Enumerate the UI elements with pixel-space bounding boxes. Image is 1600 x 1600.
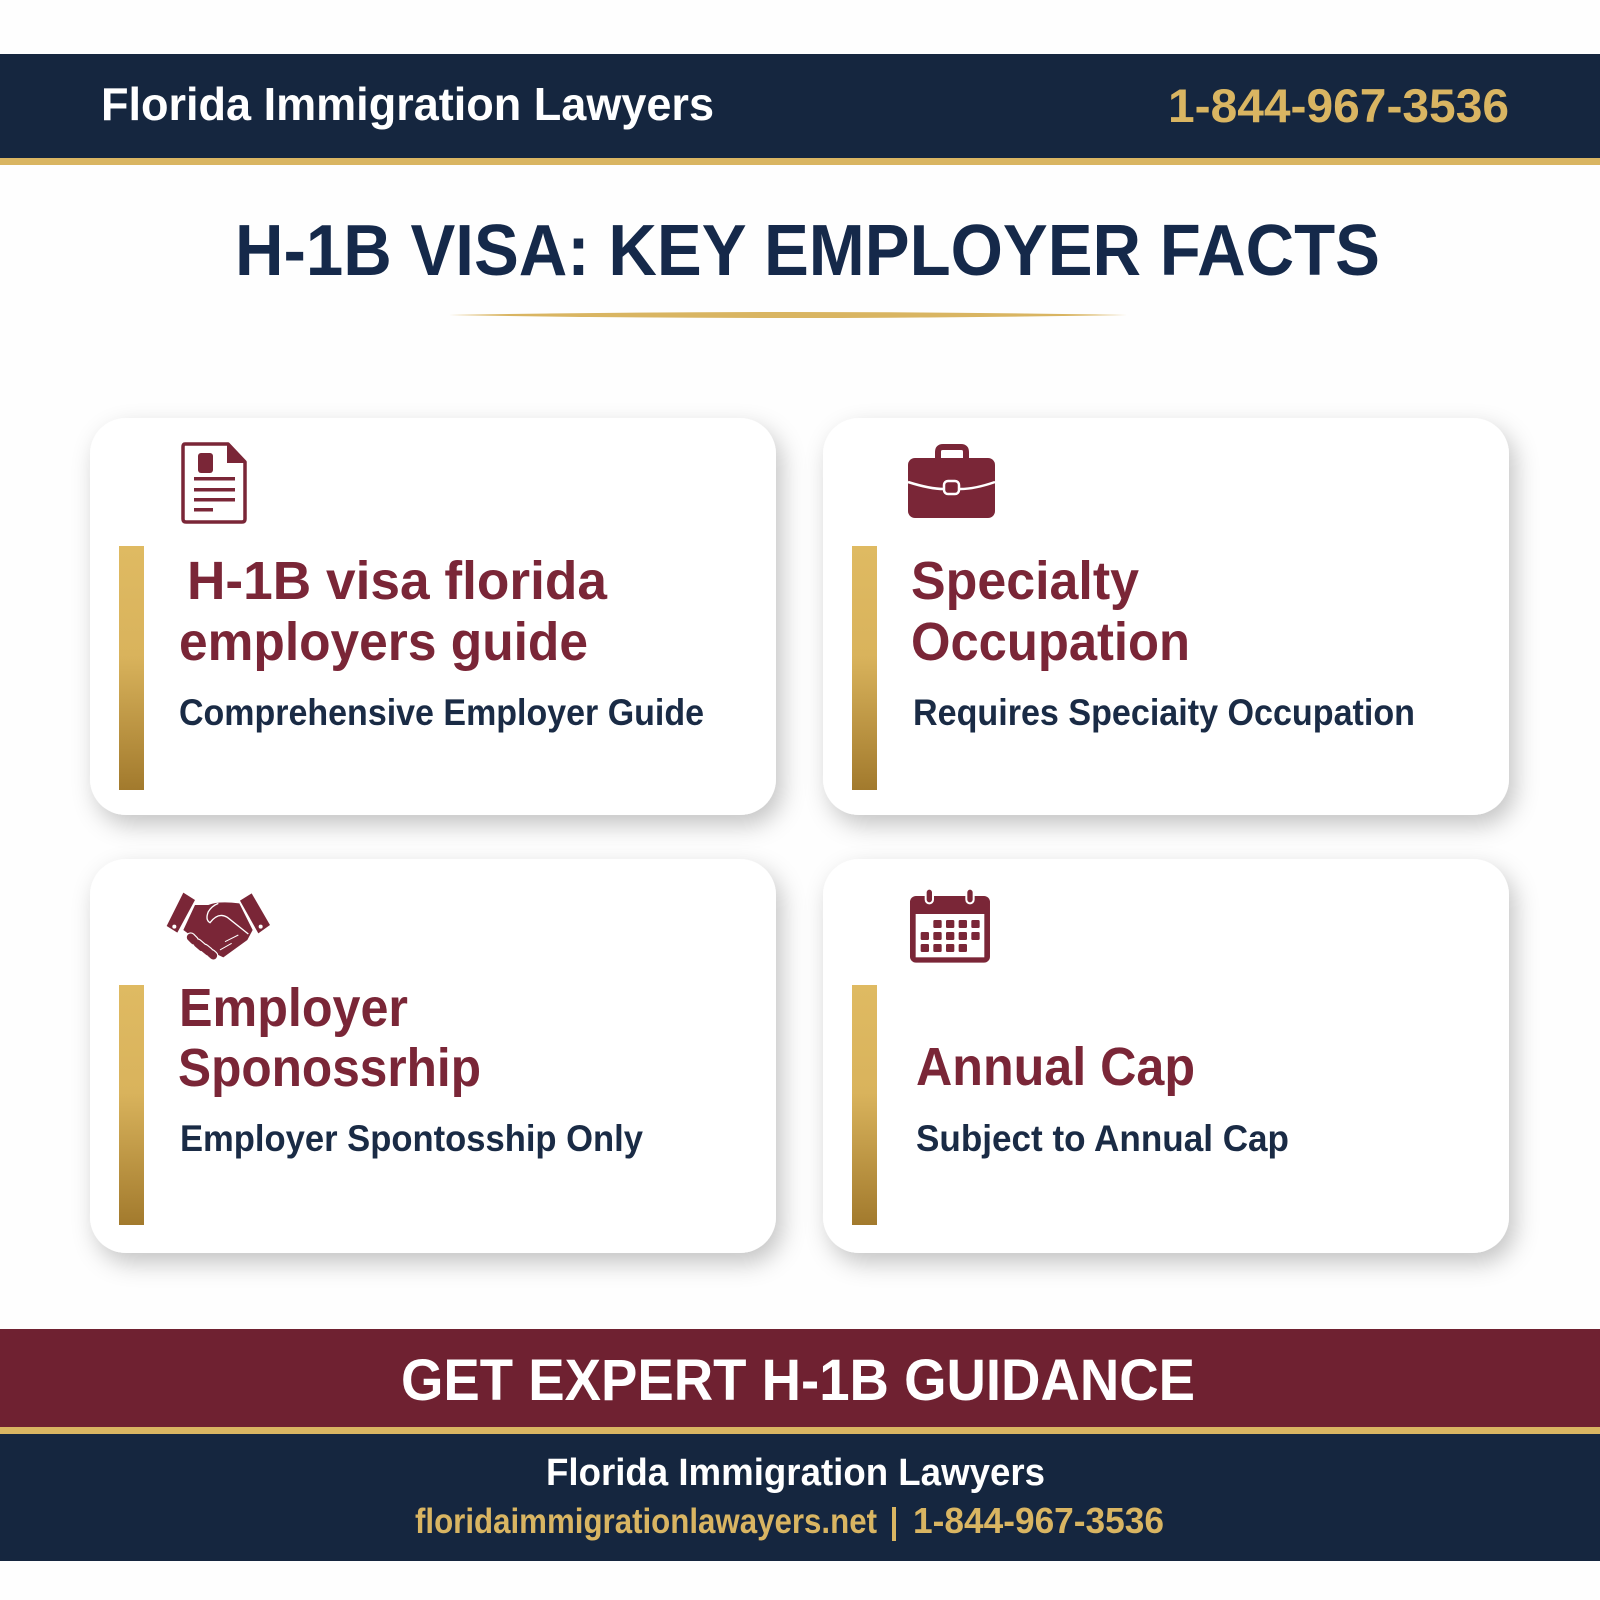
card description: Employer Spontosship Only bbox=[180, 1118, 643, 1159]
card heading: Specialty bbox=[911, 551, 1139, 611]
panel: Specialty Occupation bbox=[823, 418, 1509, 815]
icon: document bbox=[183, 444, 245, 522]
card heading: H-1B visa florida bbox=[187, 551, 608, 611]
header phone number: 1-844-967-3536 bbox=[1168, 79, 1509, 132]
header firm name: Florida Immigration Lawyers bbox=[101, 78, 714, 130]
card heading: Annual Cap bbox=[916, 1037, 1195, 1097]
panel: Annual Cap bbox=[823, 859, 1509, 1253]
footer firm name: Florida Immigration Lawyers bbox=[546, 1452, 1045, 1494]
card description: Subject to Annual Cap bbox=[916, 1118, 1289, 1159]
card heading: Sponossrhip bbox=[178, 1038, 481, 1098]
card heading: Occupation bbox=[911, 612, 1190, 672]
title underline bbox=[449, 312, 1127, 318]
call to action band bbox=[0, 1329, 1600, 1434]
footer phone number: 1-844-967-3536 bbox=[913, 1500, 1164, 1541]
card heading bbox=[179, 551, 608, 672]
card heading bbox=[178, 978, 481, 1098]
card description: Comprehensive Employer Guide bbox=[179, 692, 704, 733]
header band bbox=[0, 54, 1600, 165]
panel: H-1B visa florida employers guide bbox=[90, 418, 776, 815]
icon: handshake bbox=[167, 893, 270, 957]
gold bar 3 bbox=[119, 985, 144, 1225]
icon: calendar bbox=[910, 889, 990, 963]
gold bar 1 bbox=[119, 546, 144, 790]
card heading: employers guide bbox=[179, 612, 588, 672]
card description: Requires Speciaity Occupation bbox=[913, 692, 1415, 733]
icon: briefcase bbox=[908, 447, 995, 518]
card heading: Employer bbox=[179, 978, 408, 1038]
gold bar 2 bbox=[852, 546, 877, 790]
footer separator bbox=[892, 1507, 896, 1541]
card heading bbox=[911, 551, 1190, 672]
gold bar 4 bbox=[852, 985, 877, 1225]
footer website: floridaimmigrationlawayers.net bbox=[415, 1502, 877, 1541]
call to action text: GET EXPERT H-1B GUIDANCE bbox=[401, 1348, 1195, 1413]
main title: H-1B VISA: KEY EMPLOYER FACTS bbox=[235, 211, 1380, 291]
footer band bbox=[0, 1434, 1600, 1561]
panel: Employer Sponsorship bbox=[90, 859, 776, 1253]
